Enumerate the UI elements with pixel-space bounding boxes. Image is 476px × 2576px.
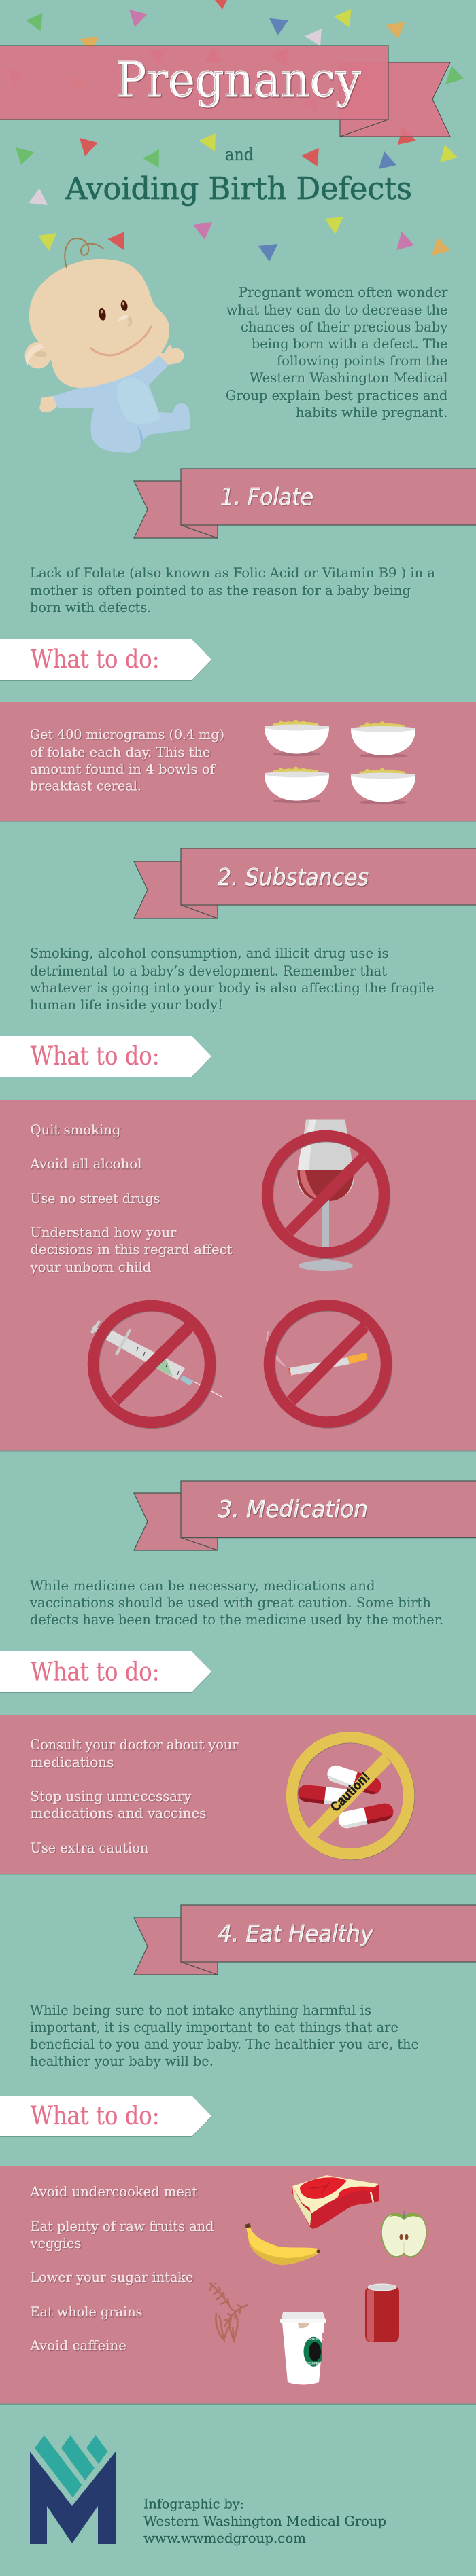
what to do tag 3: What to do: <box>31 1658 160 1687</box>
heading: 2. Substances: 2. Substances <box>218 864 369 891</box>
substances advice text: Understand how your <box>30 1224 177 1240</box>
medication advice text: Stop using unnecessary <box>30 1788 192 1804</box>
section 4 text: beneficial to you and your baby. The healthier you are, the <box>30 2036 419 2052</box>
confetti triangles <box>7 0 464 262</box>
icon: coffee cup <box>280 2312 326 2384</box>
substances advice text: decisions in this regard affect <box>30 1241 233 1257</box>
section 3 text: defects have been traced to the medicine used by the mother. <box>30 1611 443 1628</box>
healthy advice text: Avoid undercooked meat <box>30 2183 197 2200</box>
intro text: Western Washington Medical <box>250 370 447 386</box>
heading: 1. Folate: 1. Folate <box>220 484 313 511</box>
footer credit: Western Washington Medical Group <box>143 2513 386 2529</box>
section 4 text: important, it is equally important to eat things that are <box>30 2019 398 2035</box>
section 4 ribbon <box>134 1905 476 1975</box>
healthy advice text <box>30 2183 214 2353</box>
heading: 3. Medication: 3. Medication <box>218 1496 368 1523</box>
substances advice text: Quit smoking <box>30 1122 121 1138</box>
healthy advice text: Avoid caffeine <box>30 2337 126 2353</box>
icon: no wine <box>267 1120 385 1271</box>
section 3 text: vaccinations should be used with great caution. Some birth <box>29 1594 431 1611</box>
intro text: what they can do to decrease the <box>226 302 447 318</box>
section 3 text <box>29 1577 443 1628</box>
section 1 text <box>30 565 435 615</box>
section 2 text <box>30 945 435 1013</box>
folate advice text <box>30 726 224 794</box>
healthy advice text: veggies <box>30 2235 81 2251</box>
icon: coffee cup: COFFEE <box>307 2362 321 2366</box>
intro text: Group explain best practices and <box>226 387 448 404</box>
icon: no cigarette <box>267 1306 387 1423</box>
substances advice text: Avoid all alcohol <box>30 1156 141 1172</box>
icon: soda can <box>365 2284 399 2342</box>
section 4 text <box>30 2002 419 2069</box>
intro text: chances of their precious baby <box>241 319 448 335</box>
medication advice text: medications <box>30 1754 114 1770</box>
intro text: being born with a defect. The <box>252 336 447 352</box>
intro text: following points from the <box>277 353 447 369</box>
footer credit: www.wwmedgroup.com <box>143 2530 306 2546</box>
icon: no pills caution <box>292 1737 409 1855</box>
icon: apple half <box>381 2211 426 2257</box>
panel: substances <box>0 1100 476 1451</box>
what to do tag 1 <box>0 639 211 681</box>
heading: 4. Eat Healthy: 4. Eat Healthy <box>218 1920 374 1948</box>
intro text <box>226 284 448 421</box>
section 1 text: Lack of Folate (also known as Folic Acid or Vitamin B9 ) in a <box>30 565 435 581</box>
footer credit: Infographic by: <box>143 2496 244 2512</box>
panel: folate <box>0 702 476 822</box>
folate advice text: of folate each day. This the <box>30 744 211 760</box>
section 2 text: Smoking, alcohol consumption, and illicit drug use is <box>30 945 389 961</box>
healthy advice text: Lower your sugar intake <box>30 2269 193 2285</box>
illustration: baby <box>24 238 190 453</box>
section 2 text: detrimental to a baby’s development. Remember that <box>30 963 387 979</box>
what to do tag 4 <box>0 2096 211 2137</box>
folate advice text: Get 400 micrograms (0.4 mg) <box>30 726 224 743</box>
icon: four cereal bowls <box>265 720 415 804</box>
intro text: Pregnant women often wonder <box>239 284 448 300</box>
what to do tag 4: What to do: <box>31 2101 160 2130</box>
folate advice text: amount found in 4 bowls of <box>30 761 216 777</box>
section 1 text: born with defects. <box>30 599 152 615</box>
what to do tag 3 <box>0 1651 211 1693</box>
healthy advice text: Eat plenty of raw fruits and <box>30 2218 214 2234</box>
folate advice text: breakfast cereal. <box>30 778 141 794</box>
substances advice text <box>30 1122 233 1275</box>
title: Pregnancy: Pregnancy <box>116 52 361 108</box>
section 4 text: While being sure to not intake anything harmful is <box>30 2002 371 2018</box>
icon: banana <box>245 2223 320 2265</box>
panel: medication <box>0 1715 476 1875</box>
medication advice text: medications and vaccines <box>30 1805 207 1821</box>
section 1 ribbon <box>134 469 476 538</box>
logo: Western Washington Medical Group <box>30 2435 116 2544</box>
title ribbon <box>0 46 450 137</box>
section 3 ribbon <box>134 1481 476 1550</box>
medication advice text: Use extra caution <box>30 1840 149 1856</box>
section 1 text: mother is often pointed to as the reason for a baby being <box>30 582 411 598</box>
subtitle: Avoiding Birth Defects: Avoiding Birth Defects <box>65 171 412 207</box>
substances advice text: your unborn child <box>30 1259 152 1275</box>
medication advice text: Consult your doctor about your <box>30 1736 239 1753</box>
icon: meat <box>292 2175 379 2229</box>
substances advice text: Use no street drugs <box>30 1190 160 1206</box>
what to do tag 1: What to do: <box>31 645 160 674</box>
what to do tag 2: What to do: <box>31 1041 160 1071</box>
what to do tag 2 <box>0 1036 211 1077</box>
section 2 text: human life inside your body! <box>30 997 223 1013</box>
icon: no syringe <box>90 1306 223 1423</box>
section 2 text: whatever is going into your body is also affecting the fragile <box>30 980 435 996</box>
icon: wheat <box>209 2283 248 2340</box>
footer credit <box>143 2496 386 2546</box>
icon: coffee cup: STARBUCKS <box>303 2338 324 2342</box>
subtitle: and: and <box>225 145 254 164</box>
healthy advice text: Eat whole grains <box>30 2304 143 2320</box>
section 3 text: While medicine can be necessary, medications and <box>30 1577 375 1594</box>
intro text: habits while pregnant. <box>296 404 447 421</box>
section 2 ribbon <box>134 848 476 918</box>
section 4 text: healthier your baby will be. <box>30 2053 214 2069</box>
medication advice text <box>30 1736 239 1856</box>
panel: eat healthy <box>0 2166 476 2405</box>
icon: no pills caution: Caution! <box>328 1770 373 1815</box>
